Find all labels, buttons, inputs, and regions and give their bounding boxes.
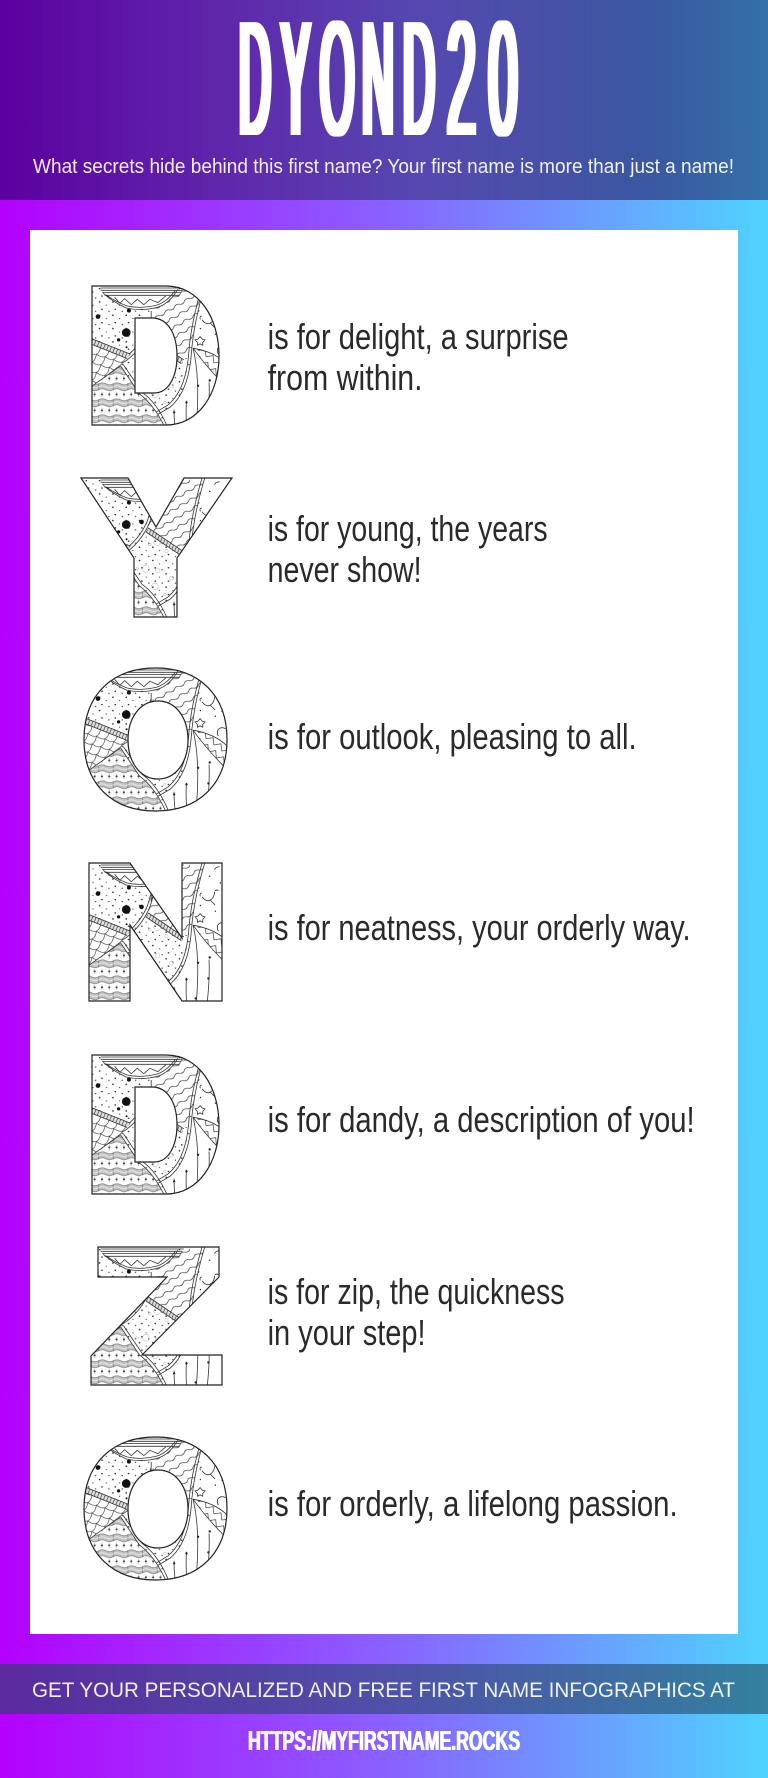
text: second O line: is for orderly, a lifelong passion.	[268, 1483, 678, 1524]
footer url: HTTPS://MYFIRSTNAME.ROCKS	[248, 1725, 520, 1756]
text: Z line: is for zip, the quickness	[268, 1271, 565, 1312]
white content panel	[30, 230, 738, 1634]
text: Y line	[268, 508, 548, 590]
text: Z line	[268, 1271, 565, 1353]
icon: patterned letter N	[88, 862, 223, 1002]
icon: patterned letter Y	[77, 475, 237, 624]
text: D line	[268, 316, 569, 398]
footer band	[0, 1664, 768, 1714]
icon: patterned letter O	[83, 667, 228, 812]
icon: patterned letter Z	[90, 1246, 223, 1386]
text: Z line: in your step!	[268, 1312, 426, 1353]
text: D line: from within.	[268, 357, 423, 398]
text: O line: is for outlook, pleasing to all.	[268, 716, 637, 757]
text: Y line: never show!	[268, 549, 422, 590]
text: D line: is for delight, a surprise	[268, 316, 569, 357]
header banner	[0, 0, 768, 200]
subtitle: What secrets hide behind this first name? Your first name is more than just a name!	[33, 155, 734, 178]
footer call to action: GET YOUR PERSONALIZED AND FREE FIRST NAME INFOGRAPHICS AT	[32, 1677, 735, 1702]
text: Y line: is for young, the years	[268, 508, 548, 549]
icon: patterned letter D (second)	[91, 1054, 220, 1195]
icon: patterned letter D	[91, 285, 220, 426]
icon: patterned letter O (second)	[83, 1436, 228, 1581]
